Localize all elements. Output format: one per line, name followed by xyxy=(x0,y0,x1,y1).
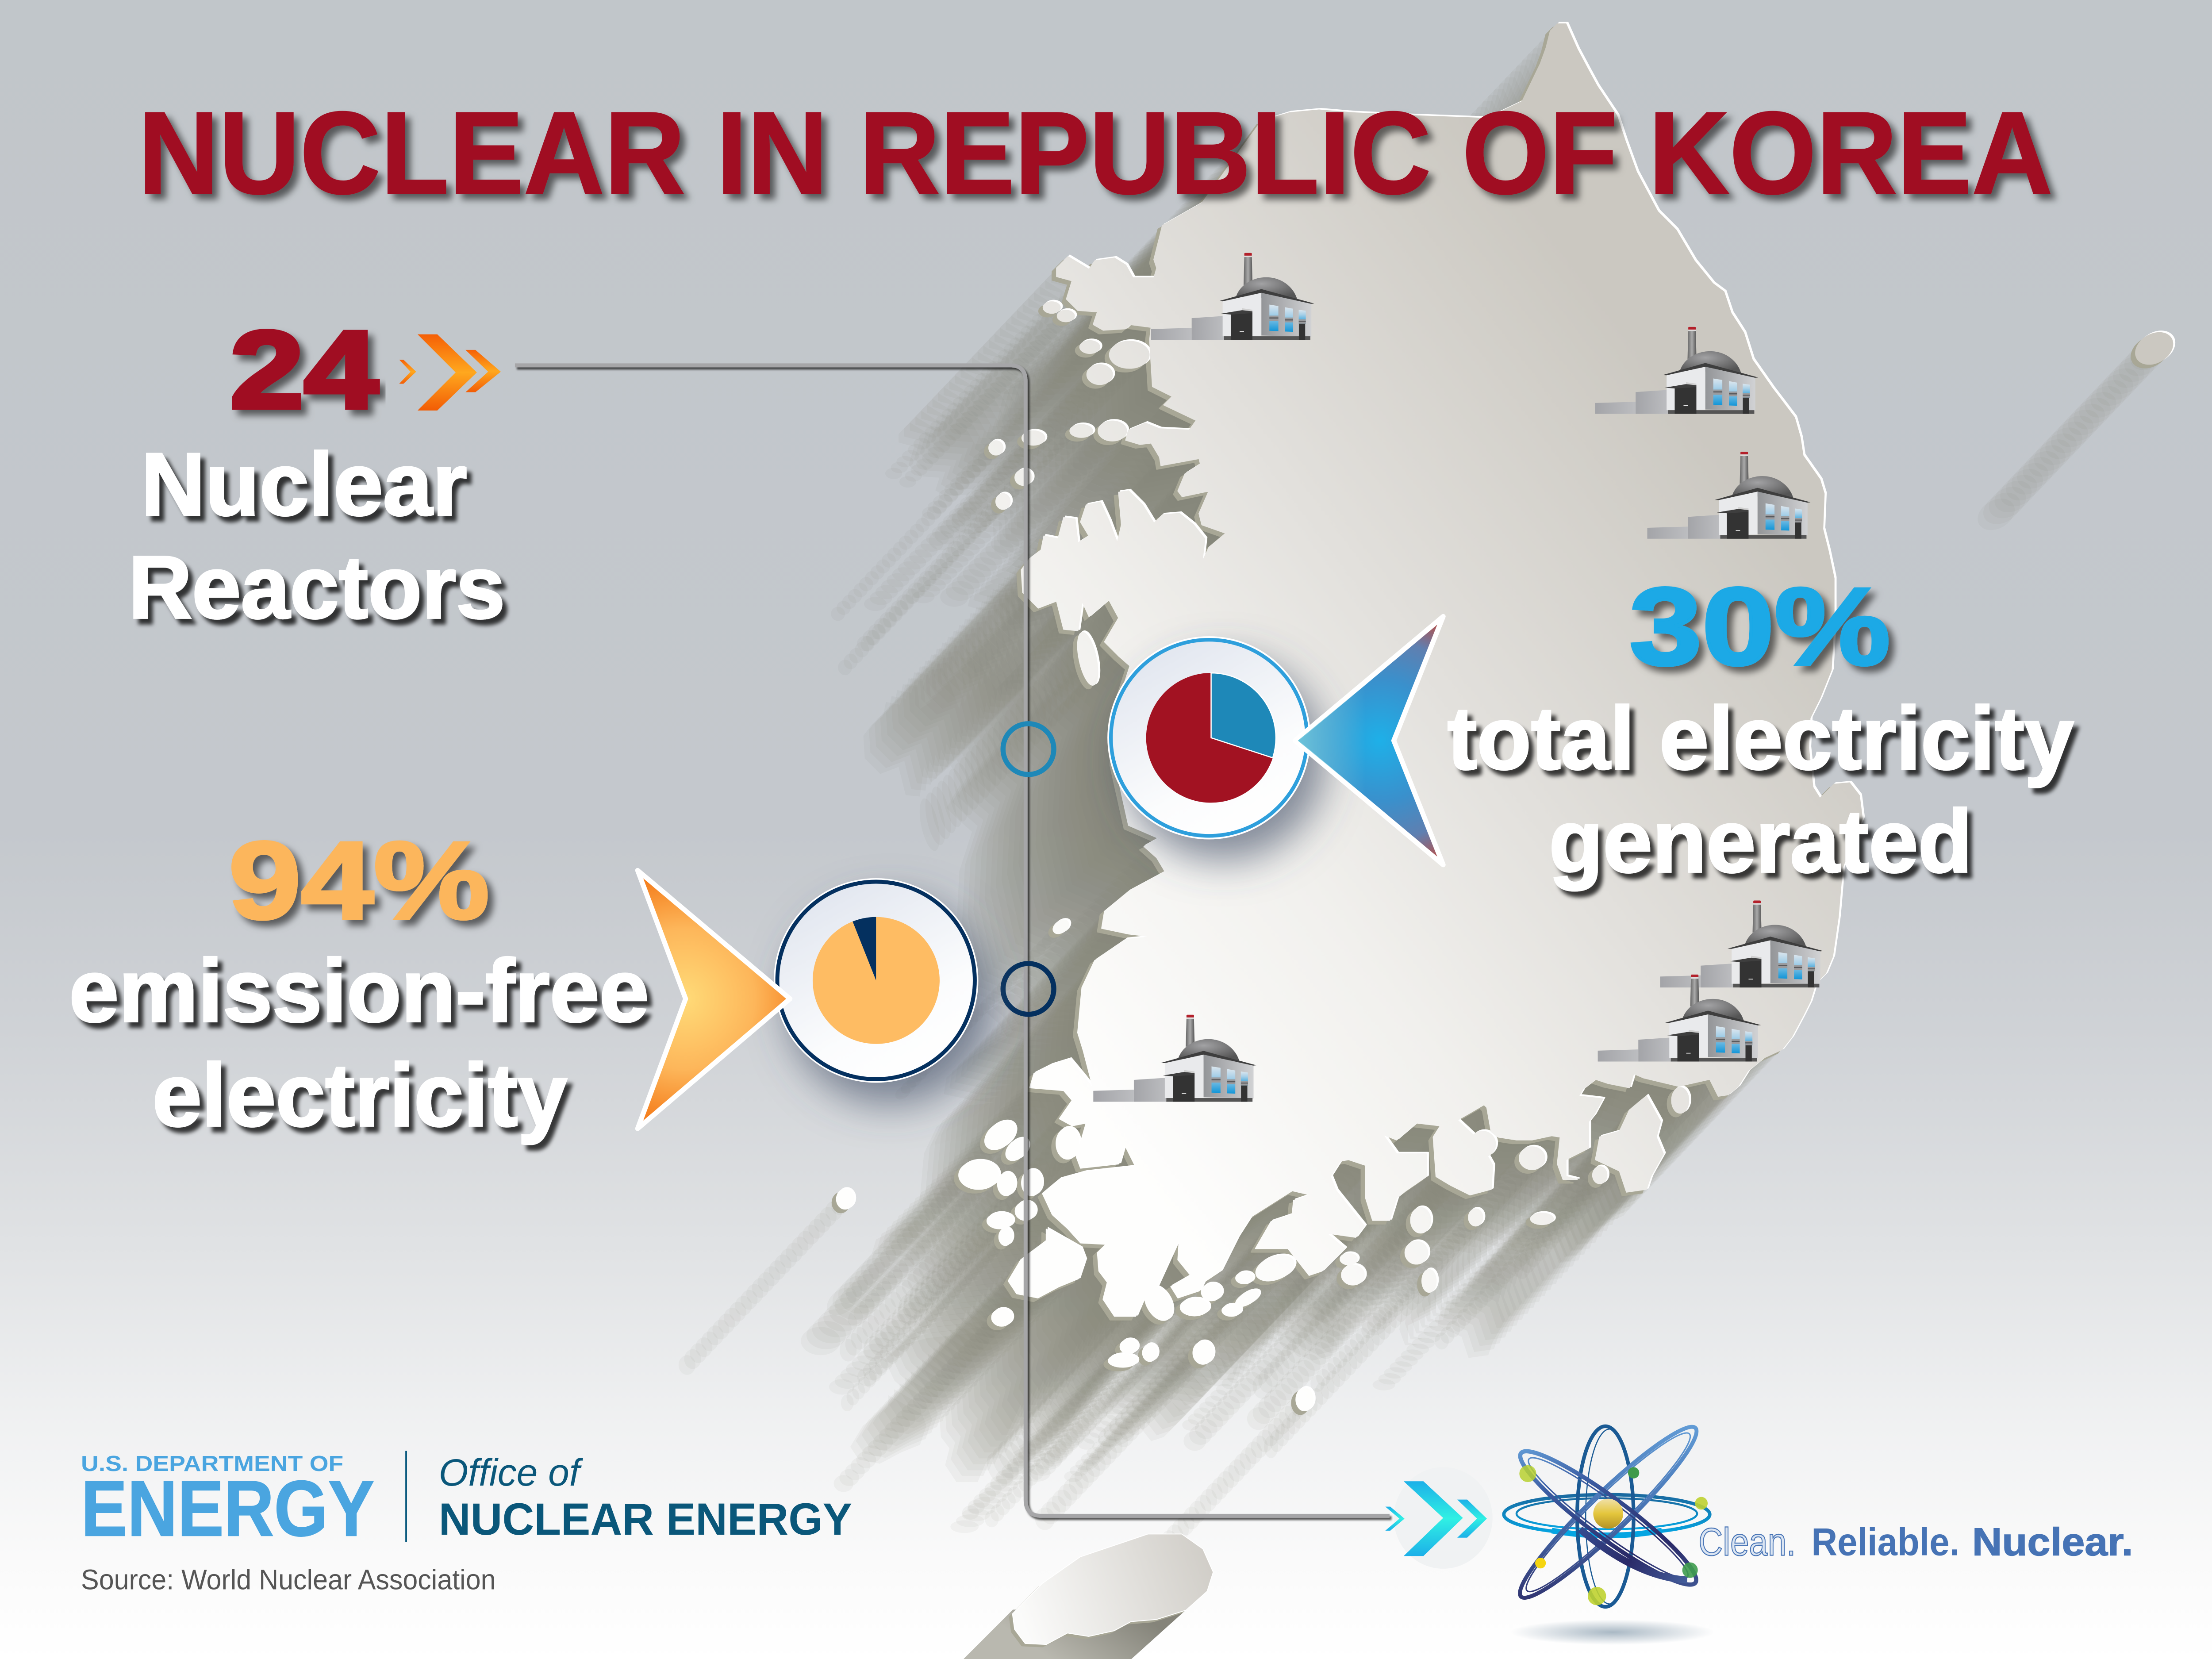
map land xyxy=(837,24,2178,1411)
chevrons orange xyxy=(399,334,501,411)
connector line xyxy=(515,365,1390,1516)
logo: Department of Energy: ENERGY xyxy=(81,1464,374,1552)
map: Jeju island xyxy=(964,1534,1213,1659)
label Nuclear Reactors xyxy=(128,434,505,637)
map: South Korea xyxy=(679,23,2180,1577)
map white highlight xyxy=(838,23,2180,1409)
ring marker: navy xyxy=(1003,964,1054,1014)
logo: Office of Nuclear Energy: NUCLEAR ENERGY xyxy=(439,1494,852,1544)
pie chart: 30 percent xyxy=(1107,636,1310,839)
pie chart: 94 percent xyxy=(774,878,978,1083)
label emission-free electricity: electricity xyxy=(152,1045,567,1145)
atom logo xyxy=(1504,1414,1714,1645)
stat: 94% emission-free xyxy=(69,819,649,1145)
label emission-free electricity: emission-free xyxy=(69,941,649,1041)
label total electricity generated: total electricity xyxy=(1448,688,2074,788)
arrow: orange pointer xyxy=(637,870,790,1129)
number 30%: 30% xyxy=(1629,565,1890,688)
logo divider xyxy=(405,1451,407,1542)
title: NUCLEAR IN REPUBLIC OF KOREA xyxy=(138,88,2053,219)
label emission-free electricity xyxy=(69,941,649,1145)
tagline: Reliable. xyxy=(1811,1520,1959,1563)
tagline xyxy=(1698,1520,2133,1563)
logo: Office of Nuclear Energy: Office of xyxy=(439,1452,584,1494)
atom orbit horizontal xyxy=(1504,1495,1710,1536)
number 24: 24 xyxy=(230,308,378,431)
label total electricity generated xyxy=(1448,688,2074,891)
ring marker: blue xyxy=(1003,724,1054,775)
tagline: Nuclear. xyxy=(1972,1520,2133,1563)
label total electricity generated: generated xyxy=(1549,791,1972,891)
chevrons blue xyxy=(1385,1467,1493,1569)
atom orbit diagonal one xyxy=(1507,1414,1709,1611)
map long shadow xyxy=(679,30,2173,1577)
logo: Department of Energy: U.S. DEPARTMENT OF xyxy=(81,1452,343,1476)
factory icon 5 xyxy=(1598,975,1761,1061)
atom nucleus xyxy=(1593,1499,1623,1528)
factory icon 3 xyxy=(1647,452,1810,539)
source note: Source: World Nuclear Association xyxy=(81,1563,496,1595)
tagline: Clean. xyxy=(1698,1520,1796,1563)
factory icon 6 xyxy=(1093,1015,1256,1102)
factory icon 4 xyxy=(1660,900,1823,987)
atom orbit vertical xyxy=(1577,1426,1634,1607)
atom electrons xyxy=(1519,1465,1708,1605)
factory icon 1 xyxy=(1151,253,1314,340)
stat: 24 nuclear reactors xyxy=(128,308,505,637)
number 94%: 94% xyxy=(229,819,490,942)
factory icon 2 xyxy=(1595,327,1758,414)
label Nuclear Reactors: Reactors xyxy=(128,538,505,637)
arrow: blue pointer xyxy=(1295,616,1443,865)
stat: 30% total electricity xyxy=(1448,565,2074,891)
map cream edge xyxy=(832,27,2174,1414)
logo: Office of Nuclear Energy xyxy=(439,1452,852,1544)
label Nuclear Reactors: Nuclear xyxy=(141,434,467,534)
atom orbit diagonal two xyxy=(1509,1437,1707,1598)
